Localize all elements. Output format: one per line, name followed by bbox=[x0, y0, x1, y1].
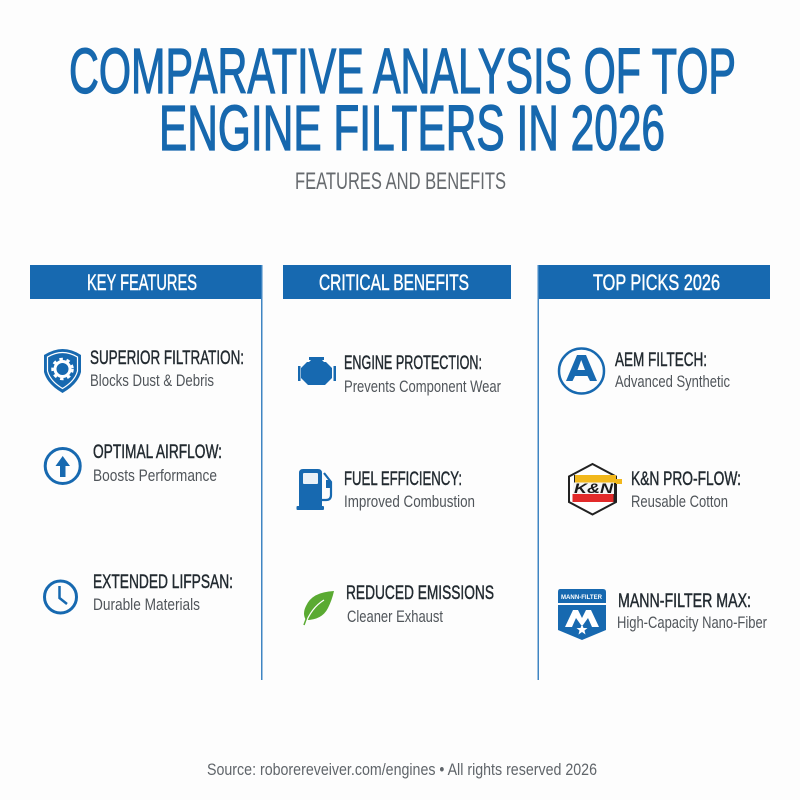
icon: up arrow in circle bbox=[45, 448, 80, 484]
item: fuel efficiency: FUEL EFFICIENCY: bbox=[344, 468, 462, 490]
item: MANN-FILTER max bbox=[617, 590, 767, 632]
item: MANN-FILTER max: MANN-FILTER MAX: bbox=[618, 590, 751, 612]
item: optimal airflow: Boosts Performance bbox=[93, 467, 217, 485]
header: critical benefits bbox=[283, 265, 511, 299]
item: AEM filtech: Advanced Synthetic bbox=[615, 373, 730, 391]
icon: engine bbox=[298, 357, 336, 385]
item: engine protection: ENGINE PROTECTION: bbox=[344, 352, 482, 374]
item: superior filtration: SUPERIOR FILTRATION: bbox=[90, 347, 244, 369]
icon: K&N logo bbox=[569, 464, 622, 514]
item: superior filtration bbox=[90, 347, 244, 390]
item: reduced emissions bbox=[346, 582, 494, 626]
source footer: Source: roborereveiver.com/engines • All rights reserved 2026 bbox=[207, 761, 597, 779]
icon: K&N logo: K&N bbox=[574, 480, 614, 496]
icon: AEM logo bbox=[559, 348, 604, 394]
subtitle: FEATURES AND BENEFITS bbox=[295, 168, 506, 195]
panel: critical benefits bbox=[283, 265, 511, 626]
title bbox=[69, 35, 736, 164]
item: extended lifespan: EXTENDED LIFPSAN: bbox=[93, 571, 233, 593]
item: optimal airflow: OPTIMAL AIRFLOW: bbox=[93, 441, 222, 463]
item: fuel efficiency: Improved Combustion bbox=[344, 493, 475, 511]
item: reduced emissions: Cleaner Exhaust bbox=[347, 608, 443, 626]
header: top picks: TOP PICKS 2026 bbox=[593, 270, 720, 295]
item: reduced emissions: REDUCED EMISSIONS bbox=[346, 582, 494, 604]
panel: top picks 2026 bbox=[538, 265, 770, 680]
item: AEM filtech: AEM FILTECH: bbox=[615, 349, 707, 371]
icon: clock bbox=[44, 581, 76, 613]
item: extended lifespan: Durable Materials bbox=[93, 596, 200, 614]
header: top picks bbox=[538, 265, 770, 299]
item: superior filtration: Blocks Dust & Debris bbox=[90, 372, 214, 390]
item: extended lifespan bbox=[93, 571, 233, 614]
item: K&N pro-flow bbox=[631, 468, 741, 511]
header: key features bbox=[30, 265, 262, 299]
item: fuel efficiency bbox=[344, 468, 475, 511]
item: engine protection bbox=[344, 352, 501, 396]
item: K&N pro-flow: Reusable Cotton bbox=[631, 493, 728, 511]
panel: key features bbox=[30, 265, 262, 680]
icon: fuel pump bbox=[296, 469, 331, 510]
icon: leaf bbox=[304, 591, 334, 625]
item: K&N pro-flow: K&N PRO-FLOW: bbox=[631, 468, 741, 490]
item: AEM filtech bbox=[615, 349, 730, 391]
header: critical benefits: CRITICAL BENEFITS bbox=[319, 270, 469, 295]
icon: MANN-FILTER logo: MANN-FILTER bbox=[561, 594, 602, 601]
icon: shield with gear bbox=[44, 349, 81, 393]
item: optimal airflow bbox=[93, 441, 222, 485]
header: key features: KEY FEATURES bbox=[87, 270, 197, 295]
item: engine protection: Prevents Component Wear bbox=[344, 378, 501, 396]
icon: MANN-FILTER logo bbox=[558, 589, 606, 640]
